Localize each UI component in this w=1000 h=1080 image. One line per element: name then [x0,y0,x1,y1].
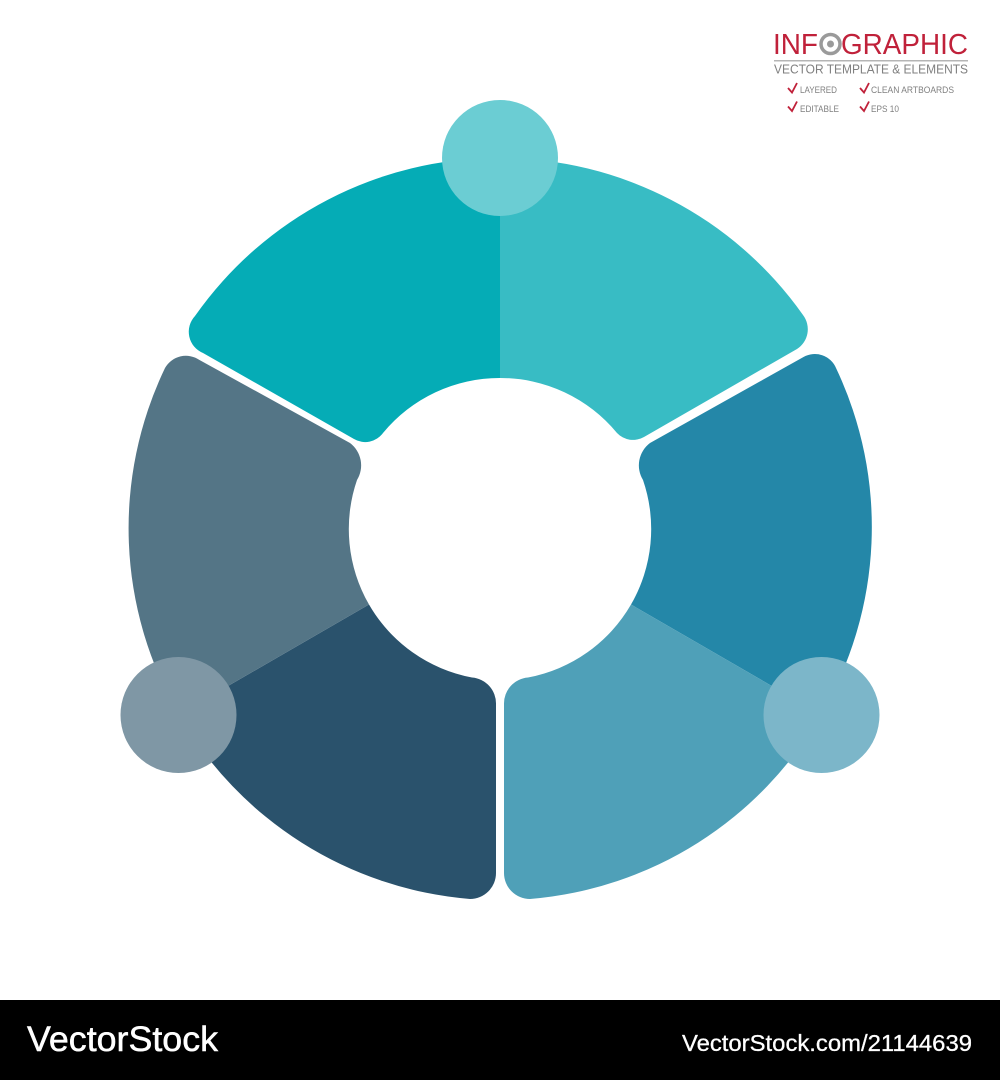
segment: top right [500,158,808,440]
logo title: GRAPHIC [841,29,968,61]
logo checklist [788,83,954,114]
logo checklist: LAYERED [800,85,837,95]
logo title: INF [773,29,818,61]
segment: left [129,356,369,714]
logo subtitle: VECTOR TEMPLATE & ELEMENTS [774,62,968,76]
node circle: left [120,657,236,773]
logo title [773,29,968,61]
segment: lower left [179,604,496,899]
segment: right [631,354,872,714]
node circle: top [442,100,558,216]
footer brand: VectorStock [27,1020,219,1059]
footer image id: VectorStock.com/21144639 [682,1030,972,1056]
cycle diagram [120,100,880,899]
footer bar [0,1000,1000,1080]
segment: top left [189,158,500,442]
icon: target letter O [821,34,840,54]
node circle: right [764,657,880,773]
logo checklist: EDITABLE [800,104,839,114]
logo checklist: EPS 10 [871,104,899,114]
logo: infographic badge [773,29,968,114]
logo checklist: CLEAN ARTBOARDS [871,85,954,95]
segment: lower right [504,604,821,899]
